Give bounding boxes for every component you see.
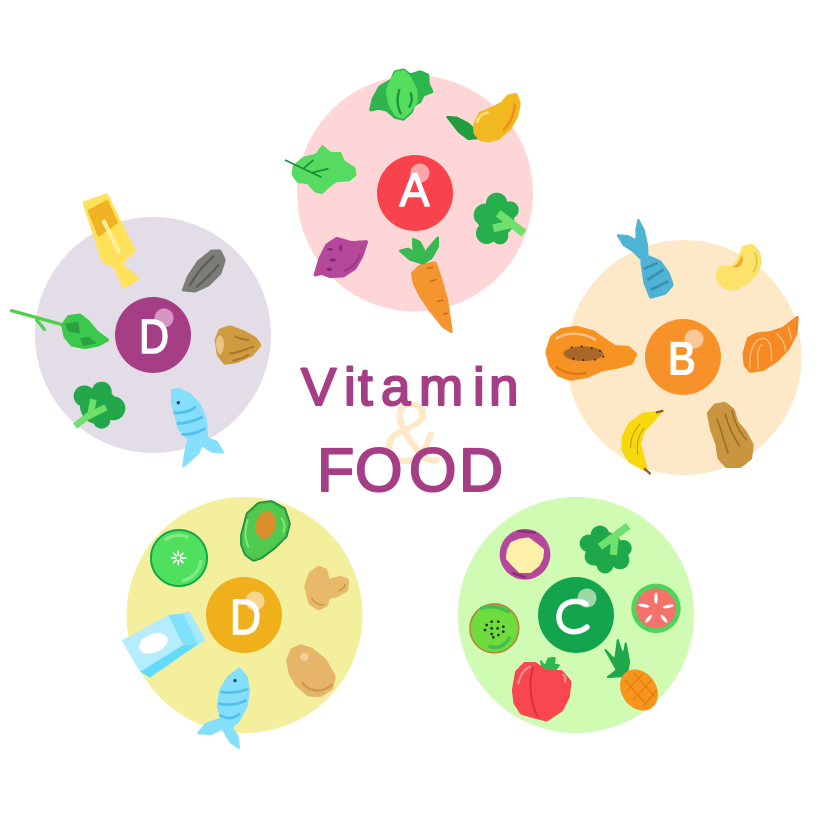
icon: cucumber: [151, 530, 207, 586]
title: Vitamin & FOOD: [301, 358, 518, 504]
panel: vitamin D purple circle: [12, 195, 271, 467]
icon: fish: [172, 389, 223, 467]
panel: vitamin D yellow circle: [122, 497, 363, 748]
panel: vitamin A circle: [285, 70, 533, 332]
icon: cashew: [717, 245, 761, 289]
icon: broccoli: [580, 526, 632, 573]
badge: vitamin A: A: [400, 163, 430, 216]
badge: vitamin D yellow: D: [230, 591, 261, 645]
icon: mango: [447, 94, 519, 141]
food icons: vitamin C: [470, 526, 681, 720]
heading: FOOD: FOOD: [317, 436, 503, 504]
icon: red pepper: [513, 658, 570, 720]
panel: vitamin B circle: [547, 219, 802, 475]
food icons: vitamin D yellow: [122, 501, 348, 748]
badge: vitamin C: [538, 577, 614, 653]
badge: vitamin B: B: [668, 333, 696, 386]
food icons: vitamin B: [547, 219, 797, 474]
icon: banana: [623, 411, 663, 474]
icon: mushroom: [306, 567, 348, 609]
icon: egg: [288, 646, 334, 696]
icon: papaya: [547, 327, 636, 379]
badge: vitamin D yellow: [206, 577, 282, 653]
panel: vitamin C circle: [458, 497, 694, 733]
icon: spinach sprig: [12, 311, 108, 348]
badge: vitamin D purple: [115, 297, 191, 373]
icon: fish: [198, 668, 249, 748]
food icons: vitamin A: [285, 70, 524, 332]
icon: oil bottle: [84, 195, 138, 287]
ampersand: &: [382, 383, 441, 482]
icon: pineapple: [605, 639, 666, 718]
badge: vitamin B: [645, 319, 721, 395]
icon: mangosteen: [500, 529, 550, 580]
icon: guava: [631, 584, 681, 633]
badge: vitamin D purple: D: [139, 311, 169, 364]
icon: peanut: [708, 403, 752, 467]
icon: milk carton: [122, 611, 206, 678]
icon: carrot: [399, 237, 451, 332]
icon: lettuce: [371, 70, 432, 119]
icon: avocado: [241, 501, 290, 561]
icon: broccoli: [474, 193, 524, 244]
badge: vitamin A: [377, 155, 453, 231]
icon: almond: [216, 327, 260, 363]
icon: fish tail: [617, 219, 672, 297]
icon: salmon: [744, 317, 797, 371]
heading: Vitamin: Vitamin: [301, 358, 518, 417]
icon: kiwi: [470, 604, 519, 653]
icon: spinach: [285, 147, 355, 193]
icon: broccoli: [74, 382, 125, 429]
icon: sunflower seed: [183, 251, 224, 291]
food icons: vitamin D purple: [12, 195, 260, 467]
icon: sweet potato: [315, 238, 367, 277]
